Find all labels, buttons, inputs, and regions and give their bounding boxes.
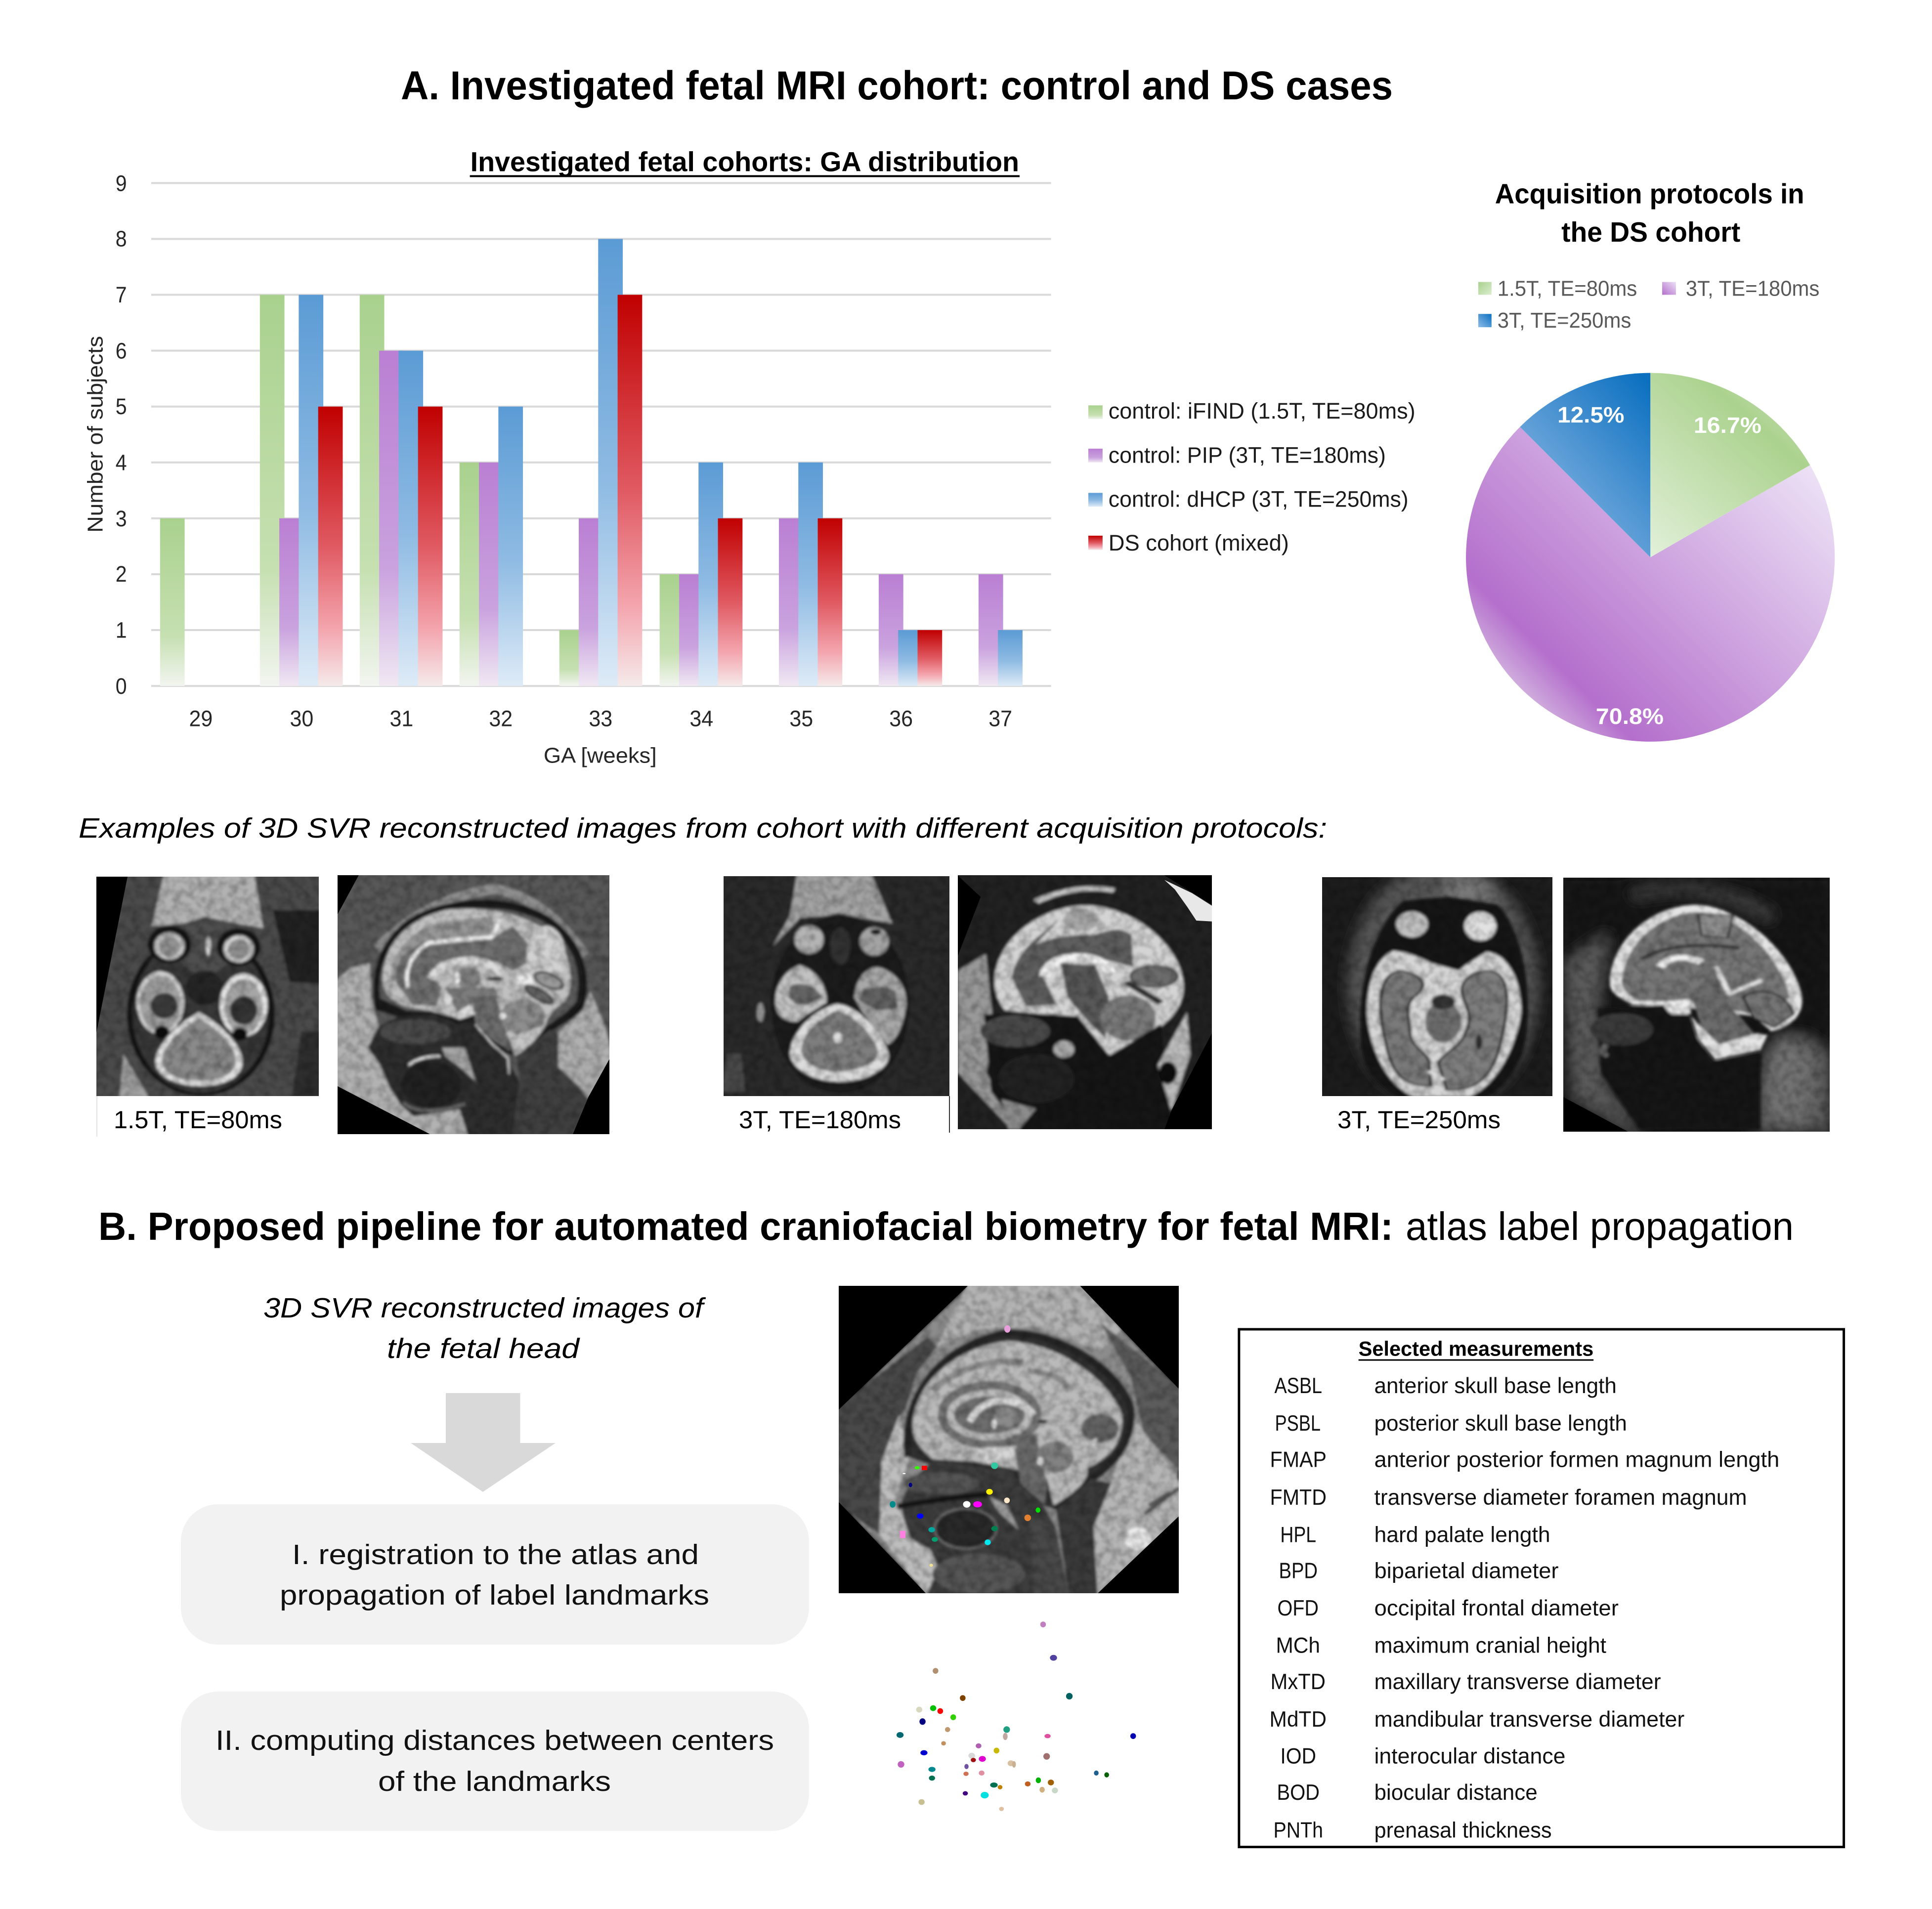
pie legend: 1.5T, TE=80ms <box>1498 276 1637 300</box>
measurement rows: ASBL <box>1274 1373 1322 1398</box>
bars: week 37 <box>979 574 1023 686</box>
measurement rows: interocular distance <box>1374 1743 1565 1768</box>
measurement rows: posterior skull base length <box>1374 1411 1627 1436</box>
MRI sagittal: 3T TE=250ms <box>1559 876 1833 1133</box>
x axis tick labels: 36 <box>889 706 913 731</box>
measurement rows: anterior skull base length <box>1374 1373 1617 1398</box>
title: section B: atlas label propagation <box>1406 1204 1794 1248</box>
x axis title: GA [weeks] <box>544 743 657 767</box>
measurement rows: MCh <box>1276 1633 1320 1658</box>
legend: bar chart cohorts <box>1088 398 1416 555</box>
y axis tick labels: 7 <box>116 282 127 307</box>
panel: registration step: propagation of label landmarks <box>280 1579 709 1611</box>
x axis tick labels: 30 <box>290 706 313 731</box>
legend: bar chart cohorts: control: dHCP (3T, TE=250ms) <box>1109 486 1409 511</box>
bars: week 35 <box>779 463 842 686</box>
x axis tick labels <box>189 706 1012 731</box>
measurement rows: biparietal diameter <box>1374 1558 1559 1583</box>
bars: week 31 <box>360 295 442 686</box>
pie chart: acquisition protocols: 16.7% <box>1694 413 1761 438</box>
measurement rows: IOD <box>1280 1743 1316 1768</box>
measurement rows: BPD <box>1279 1558 1318 1583</box>
legend: bar chart cohorts: control: iFIND (1.5T, TE=80ms) <box>1109 398 1416 424</box>
y axis title: Number of subjects <box>83 336 107 533</box>
pie legend: 3T, TE=250ms <box>1498 308 1631 333</box>
pie chart title: the DS cohort <box>1561 217 1740 248</box>
y axis tick labels: 0 <box>116 674 127 699</box>
measurement rows: biocular distance <box>1374 1780 1538 1805</box>
bars: week 34 <box>660 463 742 686</box>
measurement rows: PNTh <box>1274 1818 1323 1843</box>
MRI axial: 3T TE=180ms <box>724 876 949 1096</box>
MRI axial: 1.5T <box>96 877 319 1096</box>
x axis tick labels: 34 <box>689 706 713 731</box>
measurement rows: MxTD <box>1271 1669 1326 1694</box>
bars: week 30 <box>260 295 343 686</box>
text: 3D SVR images: the fetal head <box>387 1333 581 1364</box>
pie chart: acquisition protocols: 12.5% <box>1557 402 1624 427</box>
panel: selected measurements table <box>1239 1329 1844 1847</box>
pie chart title <box>1495 178 1804 248</box>
measurement rows: prenasal thickness <box>1374 1818 1552 1843</box>
pie legend <box>1478 276 1819 333</box>
pie chart: acquisition protocols: 70.8% <box>1596 704 1664 729</box>
measurement rows: FMTD <box>1270 1485 1327 1510</box>
x axis tick labels: 35 <box>789 706 813 731</box>
landmarks on MRI <box>890 1325 1040 1567</box>
measurement rows: HPL <box>1280 1523 1316 1547</box>
x axis tick labels: 29 <box>189 706 213 731</box>
panel: registration step: I. registration to the atlas and <box>292 1539 699 1570</box>
y axis tick labels: 6 <box>116 339 127 364</box>
measurement rows: OFD <box>1277 1596 1319 1620</box>
scatter: 3D landmark centers <box>897 1621 1136 1811</box>
measurement rows: transverse diameter foramen magnum <box>1374 1485 1747 1510</box>
title: section B: B. Proposed pipeline for automated craniofacial biometry for fetal MRI: <box>98 1204 1393 1248</box>
y axis tick labels <box>116 170 127 699</box>
measurement rows: PSBL <box>1275 1411 1321 1436</box>
chart title: Investigated fetal cohorts: GA distribution <box>471 147 1019 177</box>
measurement rows: MdTD <box>1270 1707 1327 1732</box>
pie chart title: Acquisition protocols in <box>1495 178 1804 210</box>
measurement rows: occipital frontal diameter <box>1374 1596 1619 1620</box>
panel: distance step: of the landmarks <box>378 1766 611 1797</box>
measurement rows: maximum cranial height <box>1374 1633 1607 1658</box>
panel: distance step: II. computing distances between centers <box>215 1725 774 1756</box>
arrow: down <box>411 1393 556 1492</box>
x axis tick labels: 33 <box>589 706 612 731</box>
legend: bar chart cohorts: DS cohort (mixed) <box>1109 530 1289 555</box>
y axis tick labels: 3 <box>116 506 127 531</box>
pie legend: 3T, TE=180ms <box>1686 276 1819 300</box>
legend: bar chart cohorts: control: PIP (3T, TE=180ms) <box>1109 443 1386 468</box>
MRI axial: 3T TE=250ms <box>1322 877 1552 1096</box>
y axis tick labels: 8 <box>116 226 127 252</box>
y axis tick labels: 4 <box>116 450 127 475</box>
MRI sagittal with landmarks <box>833 1283 1182 1596</box>
x axis tick labels: 32 <box>489 706 513 731</box>
bars: week 32 <box>460 407 523 686</box>
panel: distance step <box>181 1692 809 1831</box>
y axis tick labels: 5 <box>116 394 127 419</box>
x axis tick labels: 31 <box>389 706 413 731</box>
measurement rows: BOD <box>1277 1780 1320 1805</box>
bars: week 36 <box>879 574 942 686</box>
MRI sagittal: 3T TE=180ms <box>955 872 1215 1132</box>
MRI sagittal: 1.5T <box>333 871 615 1140</box>
text: 3D SVR images <box>263 1292 706 1364</box>
measurement rows: anterior posterior formen magnum length <box>1374 1447 1779 1472</box>
measurement rows <box>1270 1373 1779 1843</box>
panel: registration step <box>181 1504 809 1645</box>
label: 3T, TE=250ms: 3T, TE=250ms <box>1337 1106 1501 1134</box>
table heading: Selected measurements <box>1359 1337 1593 1360</box>
measurement rows: mandibular transverse diameter <box>1374 1707 1684 1732</box>
title: section A: A. Investigated fetal MRI cohort: control and DS cases <box>401 63 1393 108</box>
label: 1.5T, TE=80ms: 1.5T, TE=80ms <box>114 1106 282 1134</box>
heading: SVR examples: Examples of 3D SVR reconstructed images from cohort with different acquisition protocols: <box>79 812 1327 844</box>
y axis tick labels: 1 <box>116 618 127 643</box>
bars: week 29 <box>160 518 185 686</box>
y axis tick labels: 2 <box>116 561 127 587</box>
pie chart: acquisition protocols <box>1466 373 1835 742</box>
measurement rows: maxillary transverse diameter <box>1374 1669 1661 1694</box>
y axis tick labels: 9 <box>116 170 127 196</box>
text: 3D SVR images: 3D SVR reconstructed images of <box>263 1292 706 1324</box>
bars: week 33 <box>559 239 642 686</box>
label: 3T, TE=180ms: 3T, TE=180ms <box>739 1106 901 1134</box>
measurement rows: FMAP <box>1270 1447 1327 1472</box>
measurement rows: hard palate length <box>1374 1523 1550 1547</box>
bar chart: GA distribution <box>83 147 1051 767</box>
x axis tick labels: 37 <box>988 706 1012 731</box>
